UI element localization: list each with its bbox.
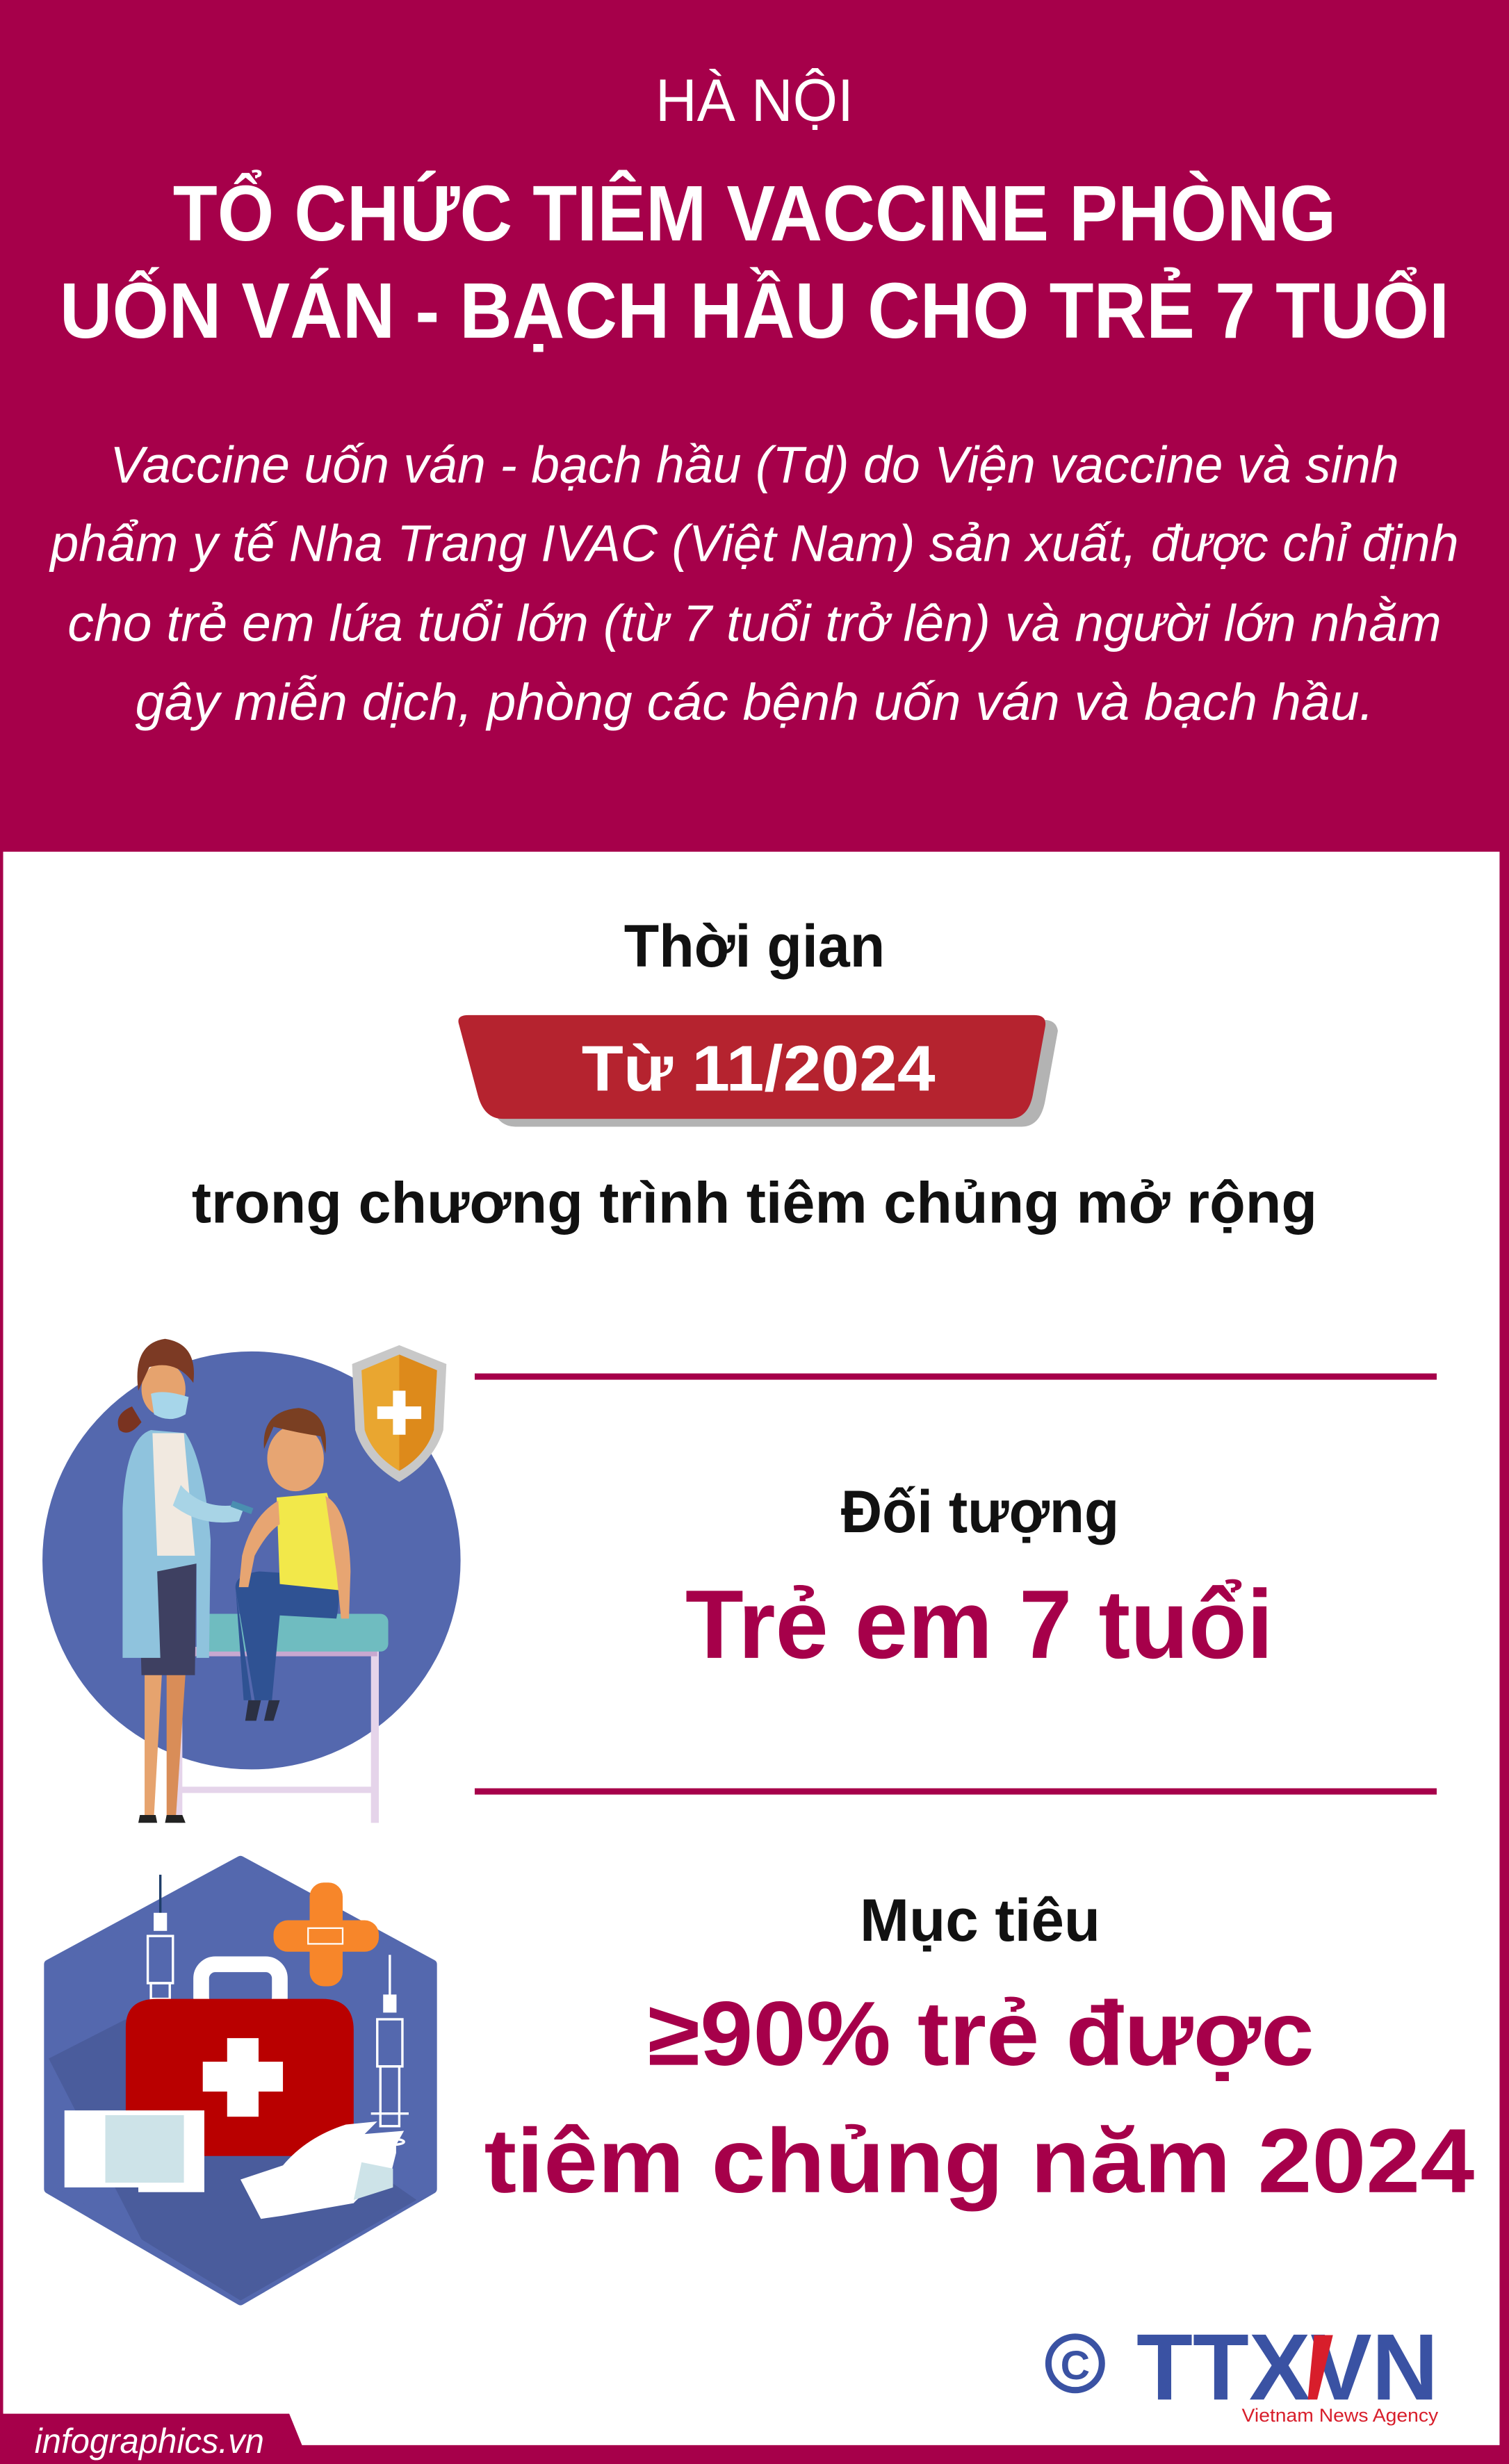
gauze xyxy=(65,2110,204,2187)
boy xyxy=(236,1571,339,1700)
subheading: expanded immunization program: trong chương trình tiêm chủng mở rộng xyxy=(192,1169,1317,1235)
left syringe xyxy=(148,1875,173,1999)
logo: TTXVN: TTXVN xyxy=(1136,2314,1438,2420)
shield xyxy=(352,1345,446,1482)
header: location: HÀ NỘI xyxy=(655,67,854,134)
value: children aged 7: Trẻ em 7 tuổi xyxy=(685,1570,1273,1679)
logo: TTXVN: Vietnam News Agency xyxy=(1242,2404,1439,2426)
bench xyxy=(176,1650,182,1823)
illustration: first aid kit hexagon xyxy=(49,1861,432,2301)
value: goal: tiêm chủng năm 2024 xyxy=(484,2110,1474,2212)
footer tab xyxy=(0,2414,310,2464)
kit handle xyxy=(201,1964,280,2012)
value: goal: ≥90% trẻ được xyxy=(648,1982,1314,2085)
intro paragraph xyxy=(49,435,1459,731)
illustration: nurse vaccinating child xyxy=(42,1339,461,1823)
white content panel xyxy=(3,852,1499,2445)
right syringe xyxy=(371,1955,409,2145)
heading: goal: Mục tiêu xyxy=(860,1887,1100,1954)
heading: target group: Đối tượng xyxy=(841,1479,1119,1545)
badge: from 11/2024 xyxy=(458,1015,1058,1126)
badge: from 11/2024: Từ 11/2024 xyxy=(582,1032,936,1104)
logo: TTXVN: C xyxy=(1061,2343,1090,2388)
intro paragraph: gây miễn dịch, phòng các bệnh uốn ván và bạch hầu. xyxy=(135,673,1374,731)
intro paragraph: cho trẻ em lứa tuổi lớn (từ 7 tuổi trở lên) và người lớn nhằm xyxy=(67,594,1442,652)
footer tab: infographics.vn xyxy=(35,2422,264,2461)
glove xyxy=(240,2121,404,2219)
title: TỔ CHỨC TIÊM VACCINE PHÒNG xyxy=(173,170,1336,257)
intro paragraph: phẩm y tế Nha Trang IVAC (Việt Nam) sản xuất, được chỉ định xyxy=(49,514,1459,572)
kit body xyxy=(126,1999,354,2156)
title xyxy=(60,170,1449,354)
plaster xyxy=(273,1882,379,1986)
intro paragraph: Vaccine uốn ván - bạch hầu (Td) do Viện vaccine và sinh xyxy=(110,435,1399,493)
nurse xyxy=(145,1673,162,1815)
heading: time: Thời gian xyxy=(624,913,885,980)
value: goal xyxy=(484,1982,1474,2212)
